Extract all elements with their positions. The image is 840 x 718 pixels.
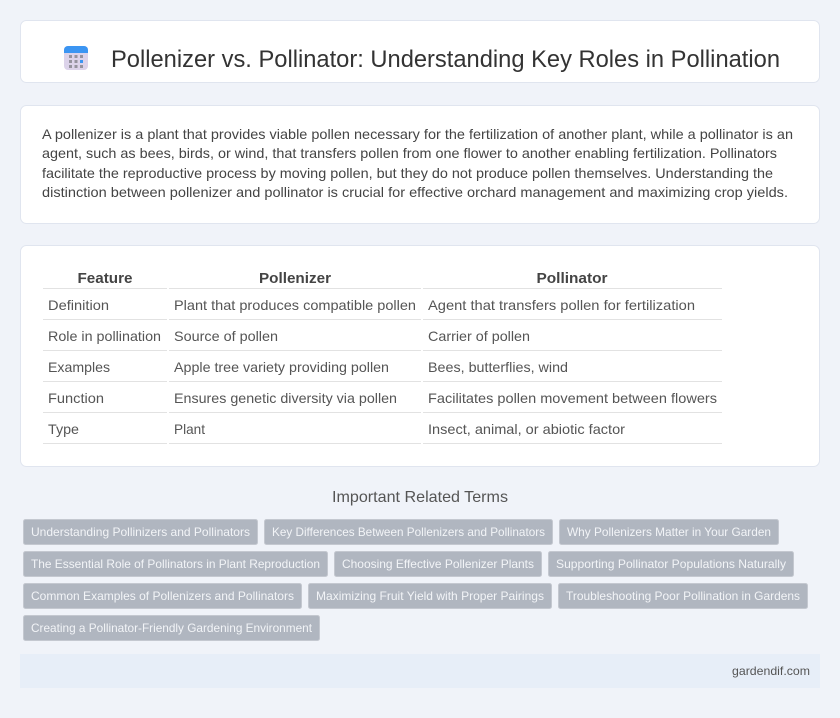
tag [24, 584, 302, 608]
table row: examples: Apple tree variety providing pollen [174, 359, 389, 375]
tag: The Essential Role of Pollinators in Plant Reproduction [31, 557, 320, 571]
table row: role in pollination: Carrier of pollen [428, 328, 530, 344]
tag: Why Pollenizers Matter in Your Garden [567, 525, 771, 539]
tag list: related terms [24, 520, 808, 640]
tag [24, 552, 328, 576]
tag: Troubleshooting Poor Pollination in Gardens [566, 589, 800, 603]
text block: introduction: agent, such as bees, birds, or wind, that transfers pollen from one flower to another enabling fertilization. Pollinators [42, 145, 777, 161]
tag: Common Examples of Pollenizers and Pollinators [31, 589, 294, 603]
table row: definition: Definition [48, 297, 109, 313]
table row: function: Function [48, 390, 104, 406]
table header: Feature [78, 270, 132, 287]
tag [560, 520, 778, 544]
tag: Key Differences Between Pollenizers and Pollinators [272, 525, 545, 539]
title: Pollenizer vs. Pollinator: Understanding Key Roles in Pollination [111, 46, 780, 73]
table row: role in pollination: Role in pollination [48, 328, 161, 344]
tag [24, 616, 320, 640]
panel: introduction [20, 106, 820, 224]
tag: Supporting Pollinator Populations Naturally [556, 557, 786, 571]
text block: introduction: facilitate the reproductive process by moving pollen, but they do not produce pollen themselves. Understanding the [42, 165, 773, 181]
text block: introduction: A pollenizer is a plant that provides viable pollen necessary for the fertilization of another plant, while a pollinator is an [42, 126, 793, 142]
table header: Pollinator [536, 270, 608, 287]
table row: examples: Bees, butterflies, wind [428, 359, 568, 375]
tag [308, 584, 552, 608]
tag [548, 552, 794, 576]
tag [24, 520, 258, 544]
table header: Pollenizer [259, 270, 331, 287]
table row: type: Type [48, 421, 79, 437]
table row: definition: Agent that transfers pollen for fertilization [428, 297, 695, 313]
tag: Understanding Pollinizers and Pollinators [31, 525, 250, 539]
tag: Creating a Pollinator-Friendly Gardening Environment [31, 621, 313, 635]
table row: function [48, 390, 717, 406]
tag [264, 520, 552, 544]
table row: role in pollination [48, 328, 530, 344]
panel: header [20, 20, 820, 82]
table row: examples: Examples [48, 359, 110, 375]
table row: definition: Plant that produces compatible pollen [174, 297, 416, 313]
heading: related terms: Important Related Terms [332, 489, 508, 506]
table row: examples [48, 359, 568, 375]
table row: function: Facilitates pollen movement between flowers [428, 390, 717, 406]
text block: introduction: distinction between pollenizer and pollinator is crucial for effective orchard management and maximizing crop yields. [42, 184, 788, 200]
table row: type [48, 421, 625, 437]
tag [334, 552, 542, 576]
table row: role in pollination: Source of pollen [174, 328, 278, 344]
text block: introduction [42, 126, 793, 200]
panel: comparison table [20, 246, 820, 466]
tag: Maximizing Fruit Yield with Proper Pairings [316, 589, 544, 603]
tag [558, 584, 808, 608]
footer [20, 654, 820, 688]
table row: type: Plant [174, 421, 205, 437]
footer: gardendif.com [732, 664, 810, 678]
table row: type: Insect, animal, or abiotic factor [428, 421, 625, 437]
icon: calendar [64, 46, 88, 70]
table row: function: Ensures genetic diversity via pollen [174, 390, 397, 406]
table row: definition [48, 297, 695, 313]
tag: Choosing Effective Pollenizer Plants [342, 557, 534, 571]
table header [78, 270, 608, 287]
